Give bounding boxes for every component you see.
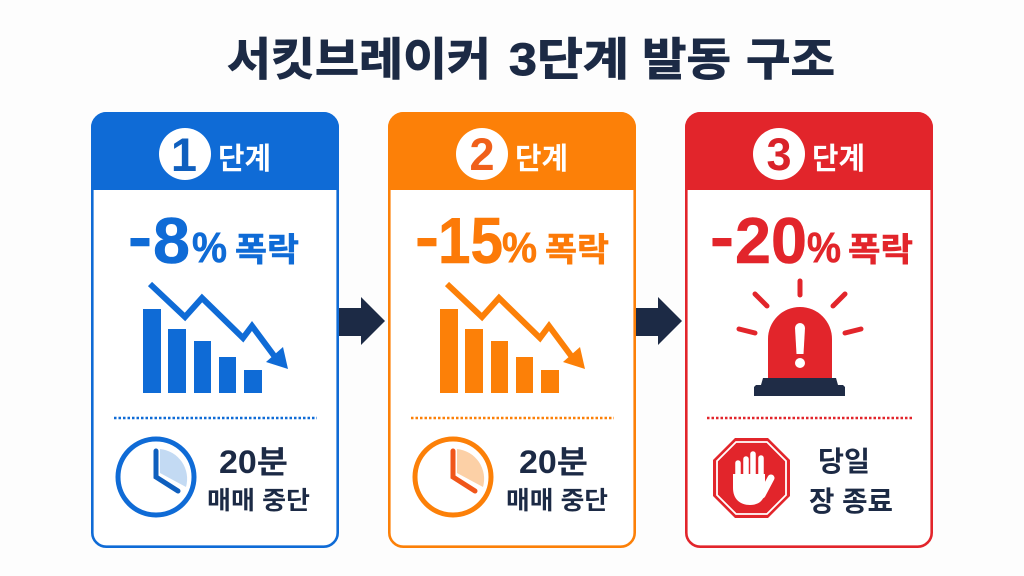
step 3 drop label (710, 200, 913, 277)
panel: step 2 (388, 112, 636, 547)
icon: siren (739, 281, 861, 396)
step 2 drop label: % (502, 224, 537, 272)
panel: step 3 (685, 112, 933, 547)
icon: clock (118, 439, 194, 515)
step 3 drop label: % (807, 224, 841, 272)
step 1 drop label (128, 200, 299, 277)
arrow: step 2 to 3 (636, 297, 682, 345)
step 1 drop label: 8 (153, 204, 190, 277)
halt text: 20분 (519, 444, 588, 480)
title: 발동 (642, 34, 731, 85)
step 1 header (91, 112, 339, 190)
step 3 header (685, 112, 933, 190)
arrow: step 1 to 2 (339, 297, 385, 345)
halt text: 20분 (219, 444, 288, 480)
step 3 drop label: - (710, 200, 734, 273)
step 3 drop label: 폭락 (848, 231, 913, 268)
step 3 header: 단계 (812, 143, 865, 176)
icon: falling bar chart (440, 284, 585, 393)
halt text: 매매 중단 (207, 487, 310, 515)
step 1 drop label: % (192, 224, 227, 272)
halt text (506, 444, 608, 515)
icon: stop hand (713, 438, 790, 518)
step 2 header (388, 112, 636, 190)
step 1 header: 1 (171, 128, 197, 181)
halt text (809, 446, 893, 517)
halt text: 당일 (818, 446, 870, 477)
step 2 drop label (415, 200, 609, 277)
step 3 header: 3 (766, 129, 792, 180)
step 2 drop label: 폭락 (545, 231, 609, 268)
step 1 drop label: 폭락 (235, 231, 299, 268)
step 1 header: 단계 (218, 143, 271, 176)
title: 3단계 (509, 34, 629, 85)
step 3 drop label: 20 (735, 204, 807, 277)
step 2 drop label: 15 (438, 204, 503, 277)
panel: step 1 (91, 112, 339, 547)
halt text: 매매 중단 (506, 487, 608, 515)
title: 구조 (746, 34, 835, 85)
step 1 drop label: - (128, 200, 152, 273)
halt text (207, 444, 310, 515)
icon: falling bar chart (143, 284, 288, 393)
title: 서킷브레이커 (227, 34, 491, 85)
step 2 drop label: - (415, 200, 439, 273)
step 2 header: 단계 (515, 143, 568, 176)
halt text: 장 종료 (809, 486, 893, 517)
title (227, 34, 835, 85)
icon: clock (415, 439, 491, 515)
step 2 header: 2 (469, 129, 495, 180)
